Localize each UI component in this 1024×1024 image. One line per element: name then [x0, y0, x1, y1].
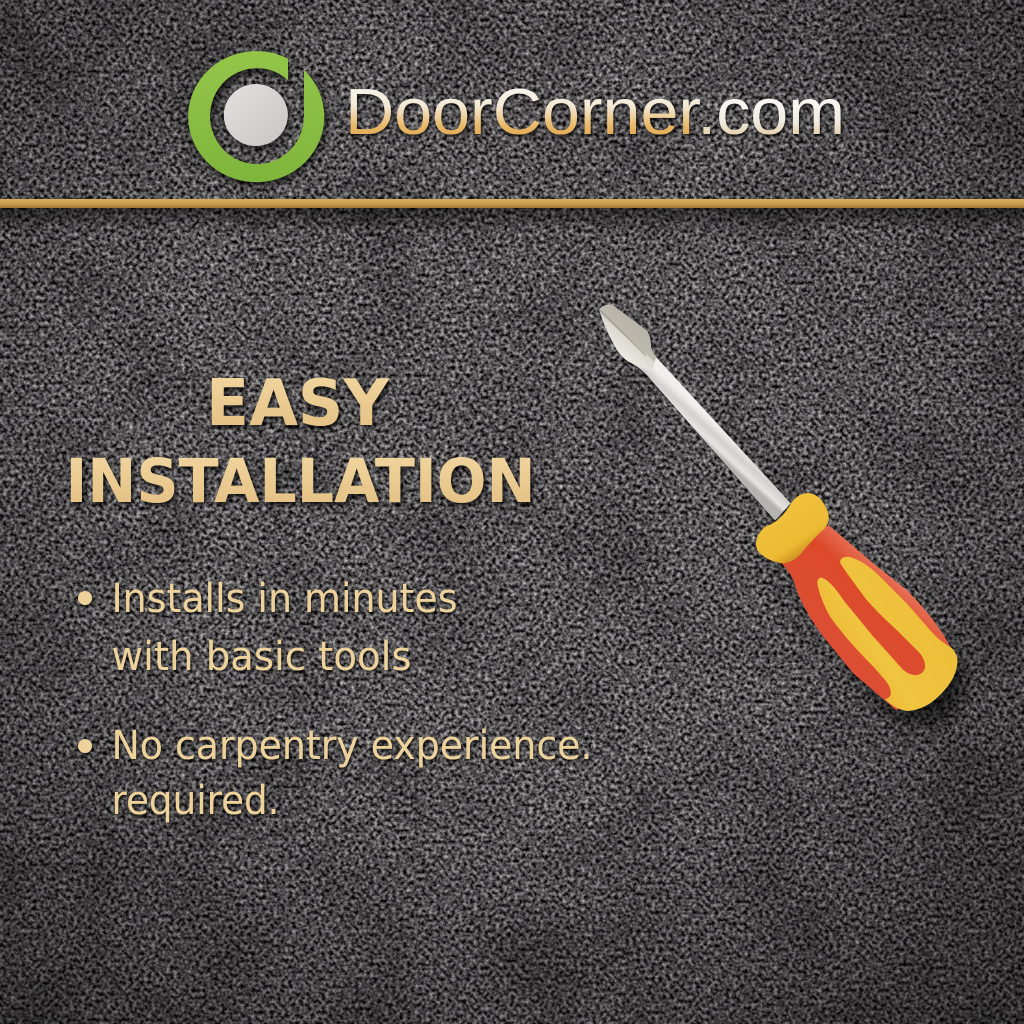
screwdriver yellow grip stripes and end cap — [817, 557, 957, 711]
logo: green ring with metal door stop — [188, 51, 324, 182]
bullet: installs in minutes — [78, 576, 458, 680]
bullet: no carpentry experience: required. — [112, 778, 280, 824]
icon: screwdriver — [599, 305, 965, 723]
screwdriver red handle — [780, 525, 950, 711]
heading: easy installation: INSTALLATION — [66, 446, 536, 517]
bullet: no carpentry experience: No carpentry experience. — [112, 723, 592, 769]
bullet: installs in minutes: with basic tools — [112, 634, 412, 680]
screwdriver shaft and blade — [599, 305, 792, 524]
screwdriver yellow collar — [756, 493, 829, 563]
heading: easy installation: EASY — [206, 367, 390, 441]
icon: silver disc — [224, 84, 288, 146]
icon: green open ring — [188, 51, 324, 182]
bullet list — [78, 576, 592, 824]
divider: gold band — [0, 199, 1024, 208]
brand name: DoorCorner .com — [345, 75, 845, 148]
bullet: installs in minutes: Installs in minutes — [112, 576, 458, 622]
screwdriver shadow — [799, 533, 965, 723]
bullet: no carpentry experience — [78, 723, 592, 824]
heading: easy installation — [66, 367, 536, 517]
